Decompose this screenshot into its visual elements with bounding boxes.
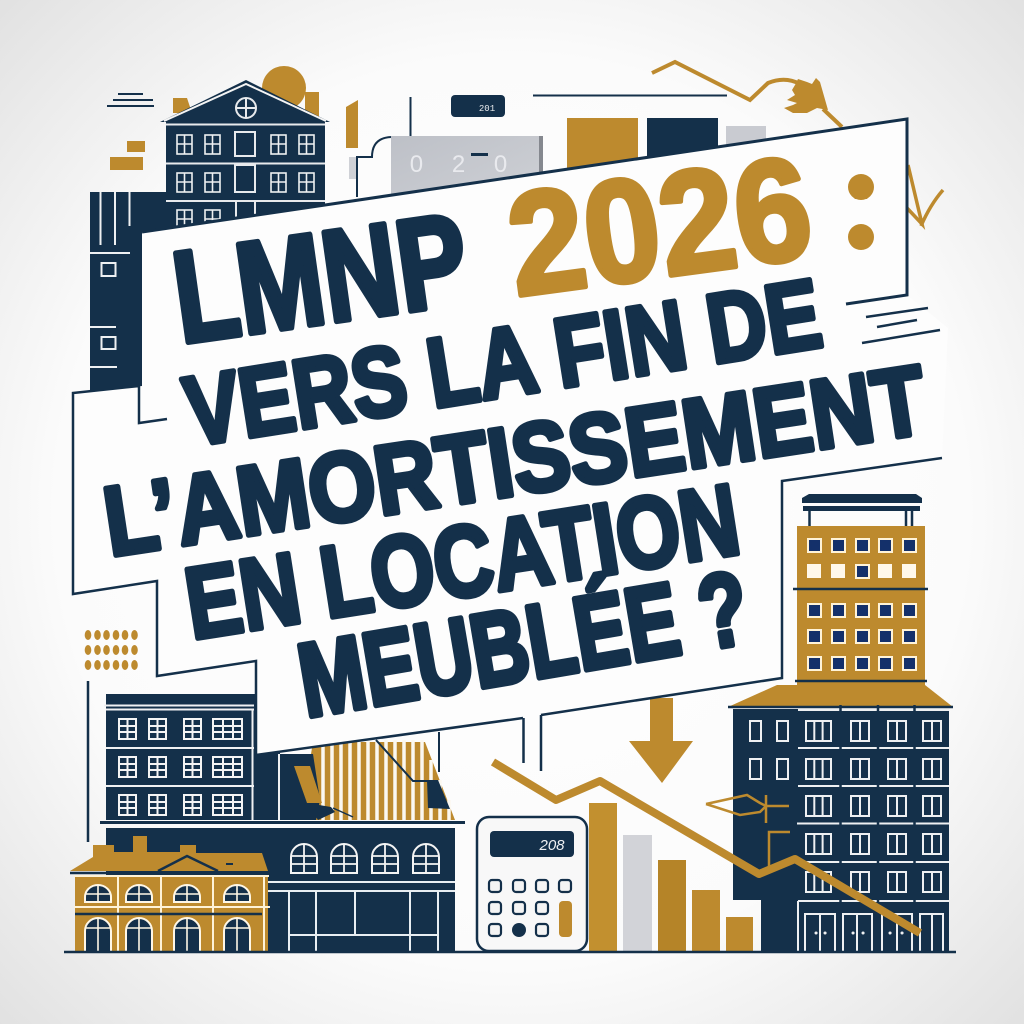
navy apartment block	[104, 694, 280, 820]
title line: VERS LA FIN DE: VERS LA FIN DE	[177, 258, 828, 467]
navy storefront	[106, 828, 455, 952]
white banner panel	[73, 119, 948, 755]
title line: 2026: 2026	[499, 125, 820, 327]
gray display card	[349, 136, 543, 206]
title line: EN LOCATION: EN LOCATION	[178, 464, 747, 661]
navy house	[160, 80, 330, 232]
bottom right illustration	[477, 494, 953, 952]
bar chart	[589, 803, 753, 951]
gold tower	[793, 494, 928, 691]
ground line	[64, 951, 956, 953]
gold squiggle arrow top right	[652, 62, 943, 226]
navy tower left	[90, 192, 166, 402]
gold compass scribble	[706, 795, 790, 869]
gold roof	[728, 685, 953, 707]
dark date tag	[451, 95, 505, 117]
gold blocks around the house	[110, 92, 358, 170]
vertical rule	[410, 96, 727, 136]
gold dot grid	[85, 630, 138, 670]
downward arrow	[629, 698, 693, 783]
top illustration group	[90, 62, 943, 402]
top colour blocks	[567, 118, 766, 178]
striped gold roof	[278, 732, 455, 820]
dark date tag: 201	[479, 104, 495, 114]
connector lines	[524, 715, 541, 771]
navy tall building	[728, 705, 953, 952]
gray display card: 0 2 0	[410, 151, 518, 178]
title colon: :	[846, 131, 876, 274]
title line: MEUBLÉE ?: MEUBLÉE ?	[290, 550, 756, 740]
wind lines	[107, 94, 154, 106]
calculator: 208	[538, 837, 565, 854]
gold townhouse	[70, 836, 270, 952]
title line: L'AMORTISSEMENT: L’AMORTISSEMENT	[97, 344, 933, 577]
bottom left buildings	[70, 630, 465, 952]
title	[97, 125, 933, 740]
calculator	[477, 817, 587, 951]
gold sun	[262, 66, 306, 110]
declining trend line	[493, 762, 920, 933]
title line: LMNP: LMNP	[165, 185, 476, 371]
